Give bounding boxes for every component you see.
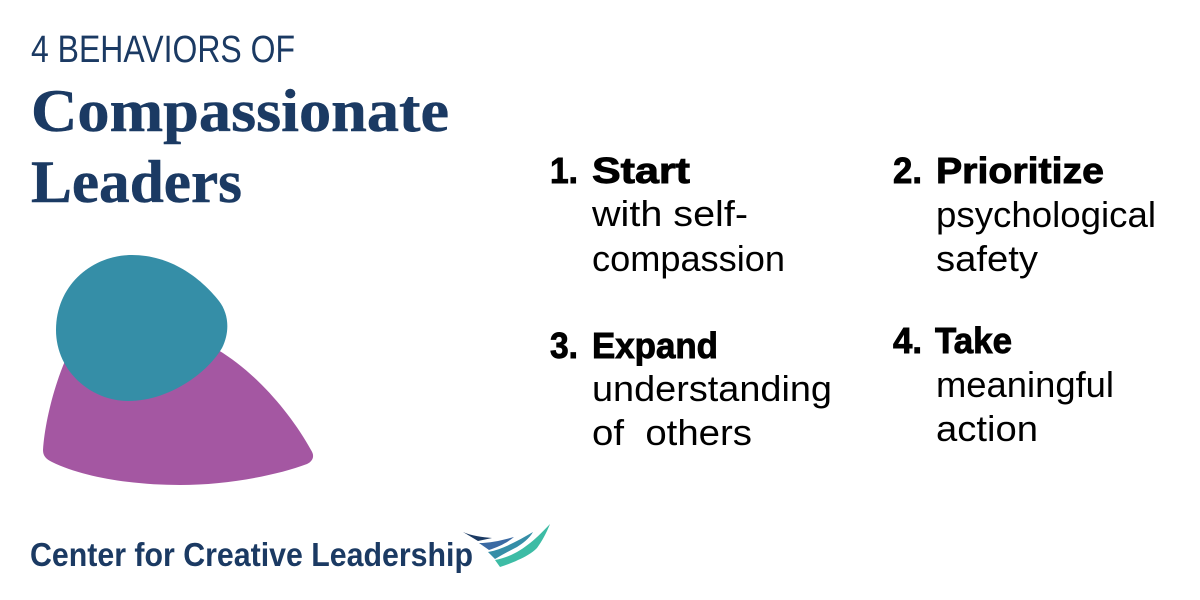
behavior 4: action bbox=[936, 408, 1038, 449]
behavior 1 bbox=[550, 150, 785, 279]
behavior 2 bbox=[893, 150, 1156, 279]
behavior 3: of others bbox=[592, 412, 752, 453]
behavior 4 bbox=[893, 320, 1114, 449]
behavior 2: psychological bbox=[936, 194, 1156, 235]
illustration: overlapping blobs bbox=[43, 255, 313, 485]
behavior 4: 4. bbox=[893, 320, 922, 361]
behavior 4: meaningful bbox=[936, 364, 1114, 405]
behavior 3: Expand bbox=[592, 325, 718, 366]
behavior 3: understanding bbox=[592, 368, 832, 409]
behavior 2: Prioritize bbox=[936, 150, 1104, 191]
behavior 2: 2. bbox=[893, 150, 922, 191]
behavior 2: safety bbox=[936, 238, 1038, 279]
behavior 3 bbox=[550, 325, 832, 453]
behavior 3: 3. bbox=[550, 325, 578, 366]
behavior 1: 1. bbox=[550, 150, 578, 191]
behavior 1: with self- bbox=[591, 193, 748, 234]
logo: Center for Creative Leadership: Center for Creative Leadership bbox=[30, 536, 473, 573]
title: 4 BEHAVIORS OF bbox=[31, 29, 295, 71]
title: Compassionate bbox=[31, 78, 449, 144]
title bbox=[31, 29, 449, 215]
teal blob bbox=[56, 255, 227, 401]
behavior 1: compassion bbox=[592, 238, 785, 279]
title: Leaders bbox=[31, 149, 242, 215]
icon: logo swoosh bbox=[463, 524, 550, 567]
behavior 1: Start bbox=[592, 150, 690, 191]
behavior 4: Take bbox=[935, 320, 1012, 361]
purple blob bbox=[43, 340, 313, 485]
